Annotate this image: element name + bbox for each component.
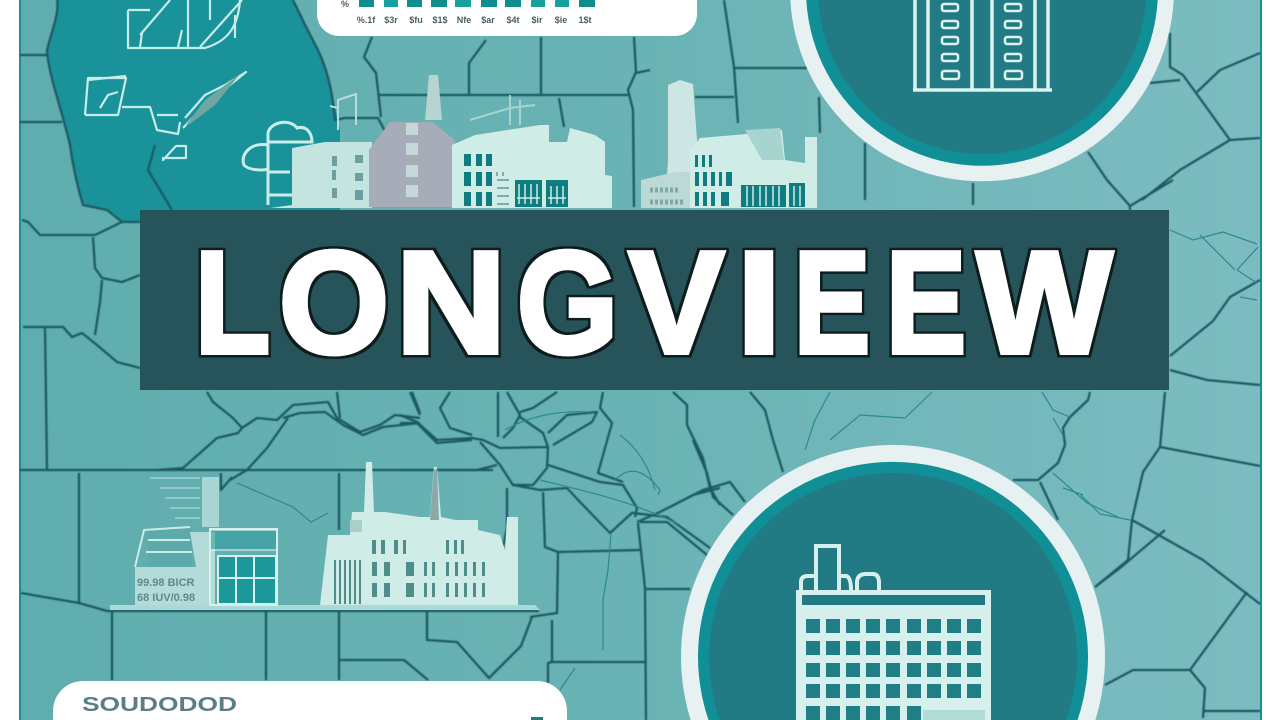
bottom right circle badge [681,445,1105,720]
title: N [396,222,506,384]
factory with stack [665,80,697,207]
glass building [210,529,277,605]
grey building [369,122,455,207]
chart axis labels: $1$ [432,15,448,25]
title: W [977,222,1112,384]
title: I [737,222,781,384]
line-art sketches on highlighted region [85,0,246,160]
office steps outline [148,529,192,567]
title: O [279,222,389,384]
card heading: SOUDODOD [82,694,237,716]
cloud outline icon [243,122,312,205]
bar chart [359,0,595,7]
card marker [531,717,543,720]
mint building [452,125,612,208]
highlighted region [47,0,340,222]
chart axis labels: $ar [481,15,495,25]
icon: tower building [913,0,1052,90]
title: G [517,222,618,384]
chart axis labels [341,0,592,25]
chart axis labels: 1$t [578,15,592,25]
title: E [794,222,870,384]
building caption text: 68 IUV/0.98 [137,592,195,604]
antenna stripes [150,478,200,518]
chart axis labels: Nfe [457,15,471,25]
chart axis labels: $4t [506,15,520,25]
skyline: top row of buildings [243,75,817,208]
chart axis labels: %.1f [357,15,376,25]
chart axis labels: $ir [531,15,543,25]
title: L [195,222,270,384]
river tributaries [237,230,1258,690]
cranes [470,95,535,125]
building caption text [137,577,195,604]
factory [320,462,518,605]
pale building [270,142,372,208]
chart axis labels: $3r [384,15,398,25]
title banner [140,210,1169,390]
office block with caption [135,532,215,605]
top right circle badge [790,0,1174,181]
icon: office building [796,546,991,720]
shelf [110,605,540,610]
wind mast [330,94,356,130]
top chart card [317,0,697,36]
title: E [886,222,966,384]
building caption text: 99.98 BICR [137,577,195,589]
skyline: lower left buildings [110,462,540,610]
bottom left card [53,681,567,720]
title: V [629,222,724,384]
chart axis labels: $fu [409,15,423,25]
chart axis labels: $ie [555,15,567,25]
